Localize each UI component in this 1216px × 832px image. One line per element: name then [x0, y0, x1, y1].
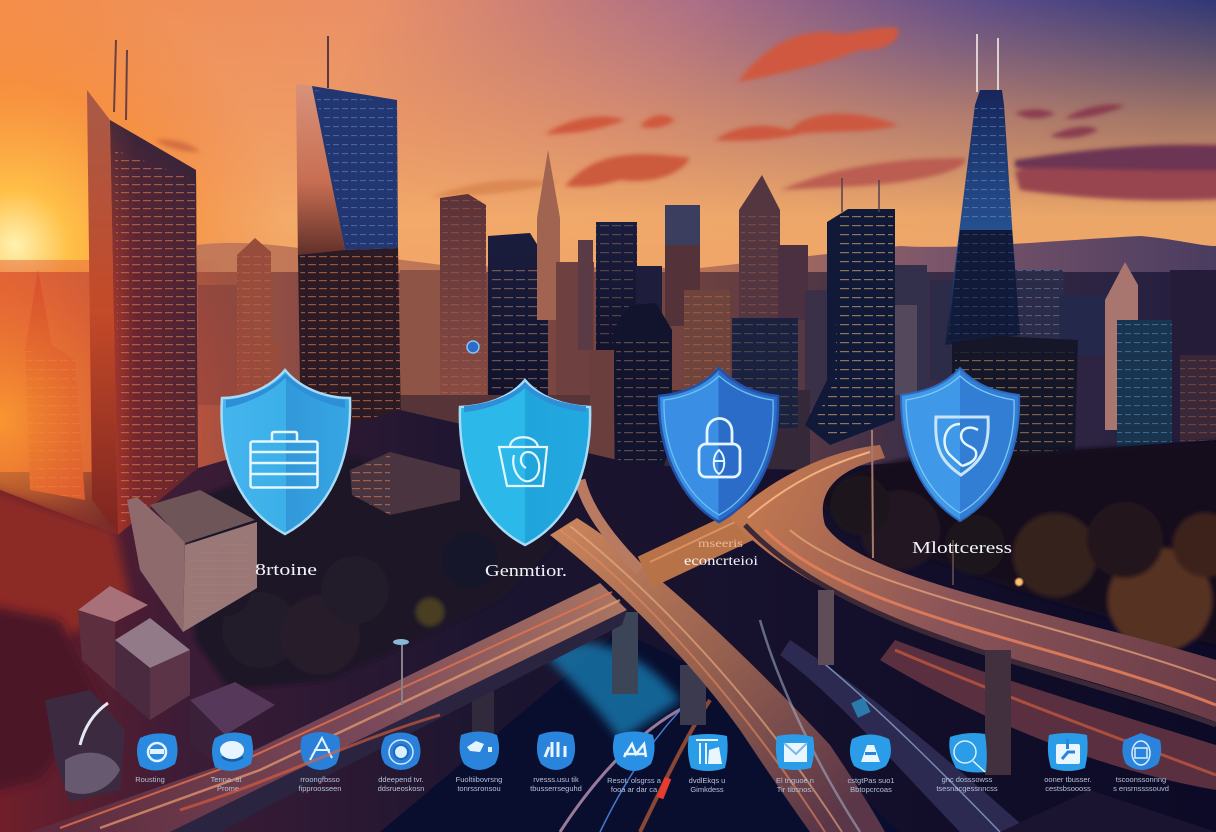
- background: sunset sky: [0, 0, 1216, 520]
- towers: central cluster: [590, 303, 798, 525]
- icon: shield with S: [936, 417, 988, 475]
- shield 1: briefcase: [222, 370, 350, 534]
- icon tile 13: s ensrnssssouvd: [1113, 784, 1169, 793]
- trees: right park: [812, 440, 1216, 652]
- icon tile 6: rvesss.usu tik: [533, 775, 579, 784]
- label: shield 3: econcrteioi: [684, 554, 758, 569]
- icon tile 9: [776, 734, 814, 794]
- icon tile 9: El tnguoe n: [776, 776, 814, 785]
- icon tile 2: Prome: [217, 784, 239, 793]
- label: shield 1: 8rtoine: [255, 560, 317, 579]
- icon tile 12: [1044, 733, 1092, 793]
- icon tile 3: [299, 732, 341, 793]
- label: shield 3: [684, 536, 758, 569]
- label: shield 2: Genmtior.: [485, 561, 567, 580]
- icon tile 12: ooner tbusser.: [1044, 775, 1092, 784]
- highway: lower central dark section: [380, 612, 900, 832]
- icon: padlock: [699, 418, 740, 477]
- road light streaks: [180, 697, 871, 810]
- distant city skyline: [198, 150, 1216, 480]
- icon tile 7: fooa ar dar ca: [611, 785, 658, 794]
- towers: right foreground blocks: [952, 262, 1172, 470]
- icon tile 8: Gimkdess: [690, 785, 724, 794]
- tower: left glass skyscraper: [87, 40, 198, 535]
- icon tile 1: [135, 733, 178, 784]
- icon tile 13: tscoonssonnng: [1116, 775, 1166, 784]
- distant mountains: [0, 236, 1216, 472]
- shield 4: S emblem: [901, 368, 1019, 521]
- left glow building: [0, 260, 300, 540]
- icon tile 11: [936, 733, 998, 793]
- icon tile 3: fipproosseen: [299, 784, 341, 793]
- highway: lower left ramp: [30, 583, 627, 832]
- icon tile 5: Fuoltiibovrsng: [456, 775, 502, 784]
- icon tile 11: gnc dosssowss: [942, 775, 993, 784]
- label: shield 4: Mlottceress: [912, 538, 1012, 557]
- tower: dark lit skyscraper: [805, 178, 895, 445]
- icon: briefcase: [250, 432, 318, 488]
- icon tile 12: cestsbsoooss: [1045, 784, 1091, 793]
- shield 3: padlock: [659, 368, 778, 522]
- icon tile 7: Resot. olsgrss a: [607, 776, 662, 785]
- icon tile 13: [1113, 733, 1169, 793]
- icon tile 5: tonrssronsou: [457, 784, 501, 793]
- icon tile 2: Tenna. at: [211, 775, 242, 784]
- icon tile 9: Tir tibsnos.: [777, 785, 813, 794]
- dark ground and parks: [0, 410, 1216, 832]
- icon tile 5: [456, 732, 502, 793]
- trees: centre park: [190, 450, 555, 690]
- icon tile 10: cstgtPas suo1: [847, 776, 895, 785]
- icon tile 10: [847, 734, 895, 794]
- street lamps: [393, 341, 1023, 705]
- clouds: [155, 28, 1216, 200]
- tower: right spire skyscraper: [945, 34, 1020, 345]
- highway: main diagonal: [550, 480, 885, 832]
- icon tile 4: [378, 732, 424, 793]
- tower: blue glass skyscraper: [296, 36, 401, 458]
- icon tile 10: Bbtopcrcoas: [850, 785, 892, 794]
- shield 2: bag: [460, 380, 590, 545]
- icon tile 1: Rousting: [135, 775, 165, 784]
- highway: right curve: [730, 445, 1216, 725]
- highway: lower right ramps: [760, 590, 1216, 832]
- icon tile 8: dvdlEkqs u: [689, 776, 725, 785]
- icon tile 2: [211, 732, 253, 793]
- icon tile 7: [607, 732, 662, 794]
- icon tile 4: ddeepend tvr.: [378, 775, 424, 784]
- label: shield 3: mseeris: [698, 536, 743, 550]
- icon tile 8: [688, 734, 728, 794]
- icon: bag with face: [499, 437, 547, 486]
- icon tile 11: tsesnacgessnncss: [936, 784, 998, 793]
- icon row: [135, 732, 1169, 794]
- mid-rise buildings left: [45, 452, 460, 802]
- icon tile 6: tbusserrseguhd: [530, 784, 582, 793]
- icon tile 6: [530, 732, 582, 793]
- icon tile 4: ddsrueoskosn: [378, 784, 424, 793]
- icon tile 3: rroongfbsso: [300, 775, 340, 784]
